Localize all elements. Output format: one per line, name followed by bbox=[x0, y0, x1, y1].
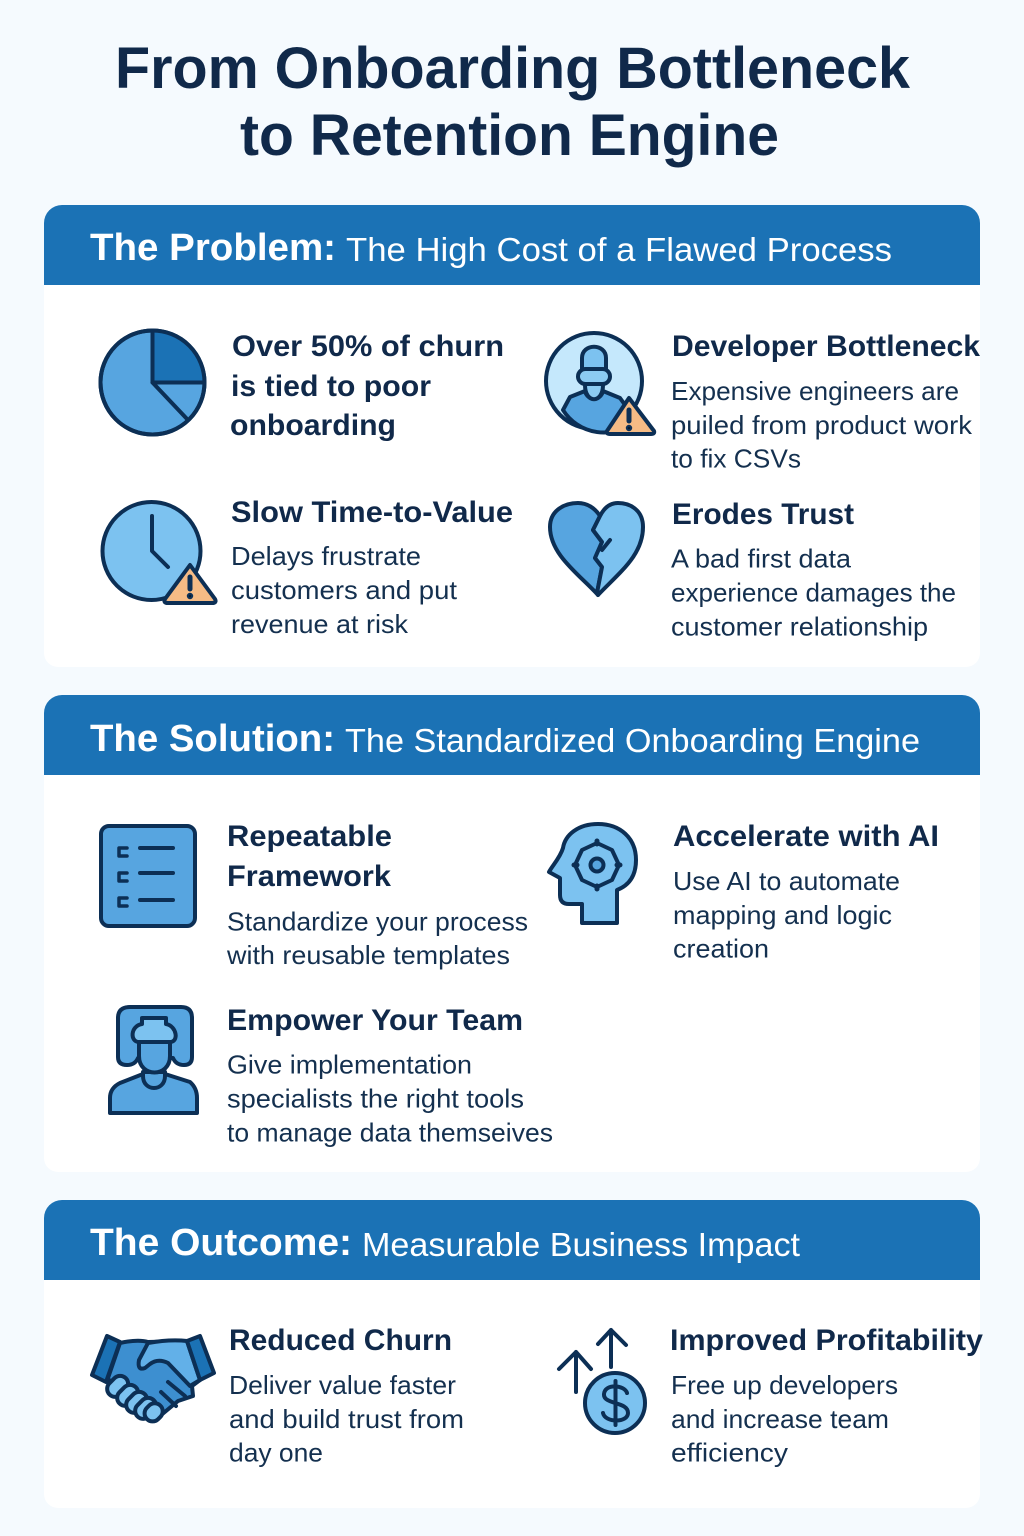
text: erodes trust: Erodes Trust bbox=[672, 498, 854, 531]
text: slow time-to-value: Slow Time-to-Value bbox=[231, 496, 513, 529]
text: improved profitability: efficiency bbox=[671, 1438, 788, 1468]
icon: developer with warning bbox=[546, 333, 654, 434]
text: repeatable framework bbox=[226, 820, 528, 970]
text: reduced churn: Reduced Churn bbox=[229, 1324, 452, 1357]
text: churn statistic: Over 50% of churn bbox=[232, 330, 504, 363]
text: erodes trust: customer relationship bbox=[671, 612, 928, 642]
text: churn statistic: onboarding bbox=[230, 409, 396, 442]
text: erodes trust: experience damages the bbox=[671, 578, 956, 608]
text: slow time-to-value: revenue at risk bbox=[231, 609, 409, 639]
panel: the solution bbox=[44, 695, 980, 1172]
text: improved profitability: Free up developers bbox=[671, 1370, 898, 1400]
icon: head with gear bbox=[549, 824, 636, 923]
text: improved profitability: Improved Profitability bbox=[670, 1324, 983, 1357]
header: the solution: The Solution: bbox=[90, 718, 335, 760]
header: the outcome: Measurable Business Impact bbox=[362, 1226, 800, 1263]
text: improved profitability: and increase team bbox=[671, 1404, 889, 1434]
text: churn statistic bbox=[230, 330, 504, 442]
header: the problem: The High Cost of a Flawed Process bbox=[346, 231, 892, 268]
text: accelerate with ai: Accelerate with AI bbox=[673, 820, 939, 853]
icon: team member bbox=[110, 1007, 197, 1113]
text: reduced churn: Deliver value faster bbox=[229, 1370, 456, 1400]
text: accelerate with ai: creation bbox=[673, 934, 769, 964]
text: slow time-to-value: customers and put bbox=[231, 575, 458, 605]
icon: broken heart bbox=[550, 503, 643, 595]
text: reduced churn bbox=[229, 1324, 464, 1468]
text: developer bottleneck: Expensive engineers are bbox=[671, 376, 959, 406]
text: erodes trust: A bad first data bbox=[671, 544, 852, 574]
title: to Retention Engine bbox=[240, 103, 779, 168]
icon: pie chart bbox=[100, 330, 204, 434]
text: developer bottleneck: to fix CSVs bbox=[671, 444, 801, 474]
header: the problem bbox=[44, 205, 980, 285]
text: reduced churn: day one bbox=[229, 1438, 323, 1468]
text: empower your team: Empower Your Team bbox=[227, 1004, 523, 1037]
text: slow time-to-value: Delays frustrate bbox=[231, 541, 421, 571]
text: repeatable framework: with reusable templates bbox=[226, 940, 510, 970]
text: churn statistic: is tied to poor bbox=[231, 370, 431, 403]
header: the problem: The Problem: bbox=[90, 227, 336, 269]
text: repeatable framework: Standardize your process bbox=[227, 906, 528, 936]
text: empower your team bbox=[227, 1004, 553, 1148]
icon: clock with warning bbox=[102, 502, 216, 603]
text: developer bottleneck: puiled from product work bbox=[671, 410, 973, 440]
header: the outcome bbox=[44, 1200, 980, 1280]
text: repeatable framework: Repeatable bbox=[227, 820, 392, 853]
text: slow time-to-value bbox=[231, 496, 513, 639]
text: developer bottleneck: Developer Bottleneck bbox=[672, 330, 980, 363]
icon: checklist bbox=[101, 826, 195, 926]
header: the outcome: The Outcome: bbox=[90, 1222, 352, 1264]
text: developer bottleneck bbox=[671, 330, 980, 474]
title bbox=[115, 36, 911, 168]
title: From Onboarding Bottleneck bbox=[115, 36, 911, 101]
header: the solution: The Standardized Onboarding Engine bbox=[345, 722, 920, 759]
text: repeatable framework: Framework bbox=[227, 860, 391, 893]
text: empower your team: specialists the right tools bbox=[227, 1084, 524, 1114]
text: improved profitability bbox=[670, 1324, 983, 1468]
icon: handshake bbox=[92, 1336, 214, 1425]
text: empower your team: to manage data themseives bbox=[227, 1118, 553, 1148]
text: accelerate with ai: Use AI to automate bbox=[673, 866, 900, 896]
panel: the outcome bbox=[44, 1200, 983, 1508]
panel: the problem bbox=[44, 205, 980, 667]
text: erodes trust bbox=[671, 498, 956, 642]
text: accelerate with ai bbox=[673, 820, 939, 964]
header: the solution bbox=[44, 695, 980, 775]
text: reduced churn: and build trust from bbox=[229, 1404, 464, 1434]
icon: dollar with up arrows bbox=[559, 1330, 645, 1433]
text: empower your team: Give implementation bbox=[227, 1050, 472, 1080]
text: accelerate with ai: mapping and logic bbox=[673, 900, 892, 930]
